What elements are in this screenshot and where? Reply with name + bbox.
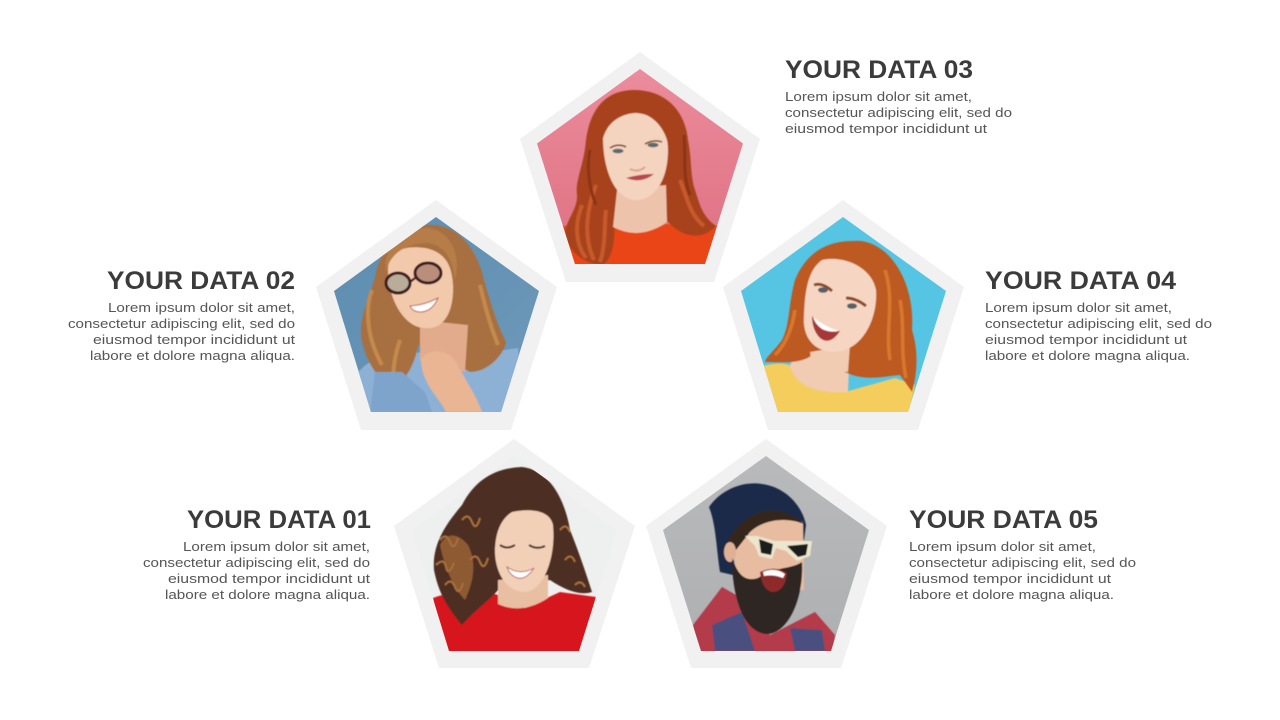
body 03: Lorem ipsum dolor sit amet, <box>785 89 972 104</box>
body 02: Lorem ipsum dolor sit amet, <box>108 300 295 315</box>
body 01: consectetur adipiscing elit, sed do <box>143 555 370 570</box>
pentagon frame 05 <box>646 439 887 668</box>
body 05: labore et dolore magna aliqua. <box>909 587 1114 602</box>
pentagon portrait 03: red-haired woman on pink <box>520 52 760 282</box>
pentagon frame 03 <box>520 52 760 282</box>
body 03: consectetur adipiscing elit, sed do <box>785 105 1012 120</box>
text block 02 <box>68 267 295 363</box>
body 04: consectetur adipiscing elit, sed do <box>985 316 1212 331</box>
heading 03: YOUR DATA 03 <box>785 56 973 84</box>
photo 04 <box>741 217 946 412</box>
pentagon portrait 01: curly-haired woman in red sweater <box>394 439 635 668</box>
pentagon portrait 05: bearded man with beanie and sunglasses <box>646 439 887 668</box>
heading 02: YOUR DATA 02 <box>107 267 295 295</box>
pentagon frame 01 <box>394 439 635 668</box>
body 04 <box>985 300 1212 363</box>
body 02 <box>68 300 295 363</box>
body 04: Lorem ipsum dolor sit amet, <box>985 300 1172 315</box>
body 04: labore et dolore magna aliqua. <box>985 348 1190 363</box>
body 03: eiusmod tempor incididunt ut <box>785 121 987 136</box>
body 05: eiusmod tempor incididunt ut <box>909 571 1111 586</box>
body 02: eiusmod tempor incididunt ut <box>93 332 295 347</box>
text block 05 <box>909 506 1136 602</box>
heading 01: YOUR DATA 01 <box>187 506 371 534</box>
photo 01 <box>432 466 596 651</box>
text block 03 <box>785 56 1012 136</box>
body 01: Lorem ipsum dolor sit amet, <box>183 539 370 554</box>
body 02: consectetur adipiscing elit, sed do <box>68 316 295 331</box>
photo 03 <box>537 69 743 264</box>
body 04: eiusmod tempor incididunt ut <box>985 332 1187 347</box>
pentagon portrait 02: woman with glasses on blue <box>316 200 557 430</box>
body 02: labore et dolore magna aliqua. <box>90 348 295 363</box>
heading 04: YOUR DATA 04 <box>985 267 1176 295</box>
text block 04 <box>985 267 1212 363</box>
pentagon frame 02 <box>316 200 557 430</box>
photo 05 <box>663 456 869 651</box>
pentagon portrait 04: laughing red-haired woman on cyan <box>723 200 964 430</box>
body 03 <box>785 89 1012 136</box>
body 01 <box>143 539 370 602</box>
body 05: Lorem ipsum dolor sit amet, <box>909 539 1096 554</box>
body 01: labore et dolore magna aliqua. <box>165 587 370 602</box>
photo 02 <box>334 217 539 412</box>
heading 05: YOUR DATA 05 <box>909 506 1098 534</box>
body 05 <box>909 539 1136 602</box>
pentagon frame 04 <box>723 200 964 430</box>
body 05: consectetur adipiscing elit, sed do <box>909 555 1136 570</box>
text block 01 <box>143 506 371 602</box>
body 01: eiusmod tempor incididunt ut <box>168 571 370 586</box>
